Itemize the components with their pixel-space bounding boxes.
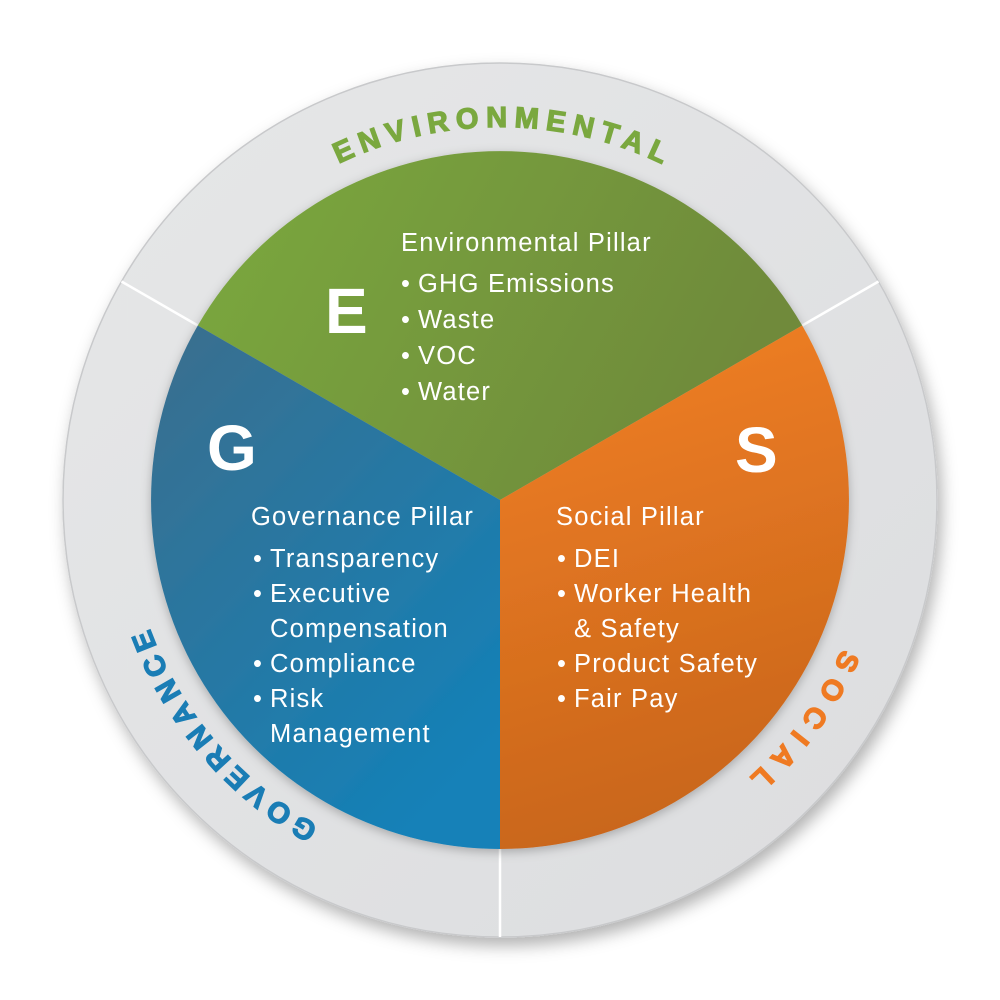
governance text: Management	[270, 720, 431, 748]
governance text: Governance Pillar	[251, 503, 474, 531]
social text: Social Pillar	[556, 503, 705, 531]
environmental text: •	[401, 342, 411, 370]
governance text: •	[253, 580, 263, 608]
governance text: Compensation	[270, 615, 449, 643]
environmental text: Waste	[418, 306, 495, 334]
environmental text: •	[401, 306, 411, 334]
governance text	[251, 503, 474, 748]
ring label: SOCIAL: SOCIAL	[749, 650, 858, 786]
letter S: S	[735, 414, 778, 486]
outer ring	[63, 63, 937, 937]
environmental text	[401, 229, 652, 406]
social text: Fair Pay	[574, 685, 679, 713]
environmental text: •	[401, 270, 411, 298]
governance text: •	[253, 685, 263, 713]
social text: Product Safety	[574, 650, 758, 678]
environmental text: VOC	[418, 342, 477, 370]
slice: governance	[151, 326, 500, 849]
social text: •	[557, 685, 567, 713]
social text: & Safety	[574, 615, 680, 643]
ring label: GOVERNANCE: GOVERNANCE	[131, 628, 315, 840]
governance text: Compliance	[270, 650, 417, 678]
slice: social	[500, 326, 849, 849]
environmental text: GHG Emissions	[418, 270, 615, 298]
governance text: Risk	[270, 685, 324, 713]
governance text: Transparency	[270, 545, 439, 573]
social text: •	[557, 650, 567, 678]
ring label: ENVIRONMENTAL: ENVIRONMENTAL	[331, 106, 664, 165]
environmental text: Environmental Pillar	[401, 229, 652, 257]
slice: environmental	[198, 151, 802, 500]
social text: •	[557, 580, 567, 608]
pie chart	[151, 151, 849, 849]
social text: •	[557, 545, 567, 573]
social text: DEI	[574, 545, 620, 573]
letter G: G	[207, 412, 257, 484]
governance text: •	[253, 545, 263, 573]
governance text: Executive	[270, 580, 391, 608]
letter E: E	[325, 275, 368, 347]
environmental text: Water	[418, 378, 491, 406]
social text: Worker Health	[574, 580, 752, 608]
governance text: •	[253, 650, 263, 678]
social text	[556, 503, 758, 713]
environmental text: •	[401, 378, 411, 406]
